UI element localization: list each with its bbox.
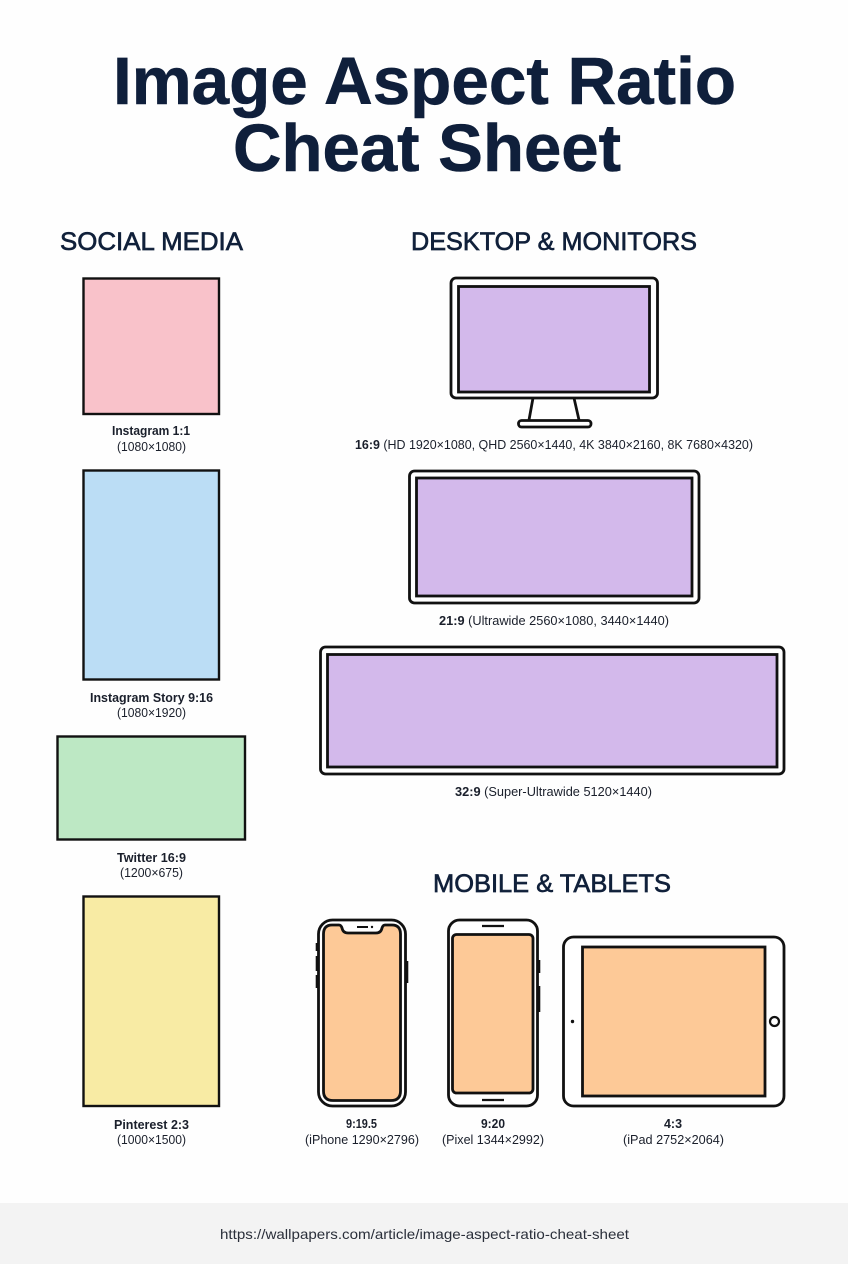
iPad label: 4:3 [664,1117,682,1131]
Pinterest swatch [84,896,219,1106]
21:9 label: 21:9 (Ultrawide 2560×1080, 3440×1440) [439,614,669,628]
Twitter label: (1200×675) [120,866,183,880]
icon: iPad [564,937,784,1106]
Instagram Story swatch [84,470,219,680]
panel: mobile and tablets [305,870,784,1147]
Instagram Story label: (1080×1920) [117,706,186,720]
heading: mobile and tablets: MOBILE & TABLETS [433,870,671,898]
panel: desktop and monitors [320,228,784,799]
Pixel label: (Pixel 1344×2992) [442,1133,544,1147]
panel: social media [58,228,245,1147]
icon: 16:9 monitor [451,278,658,427]
Instagram Story label: Instagram Story 9:16 [90,691,213,705]
Instagram 1:1 label: (1080×1080) [117,440,186,454]
iPhone label: 9:19.5 [346,1117,377,1131]
Instagram 1:1 label [112,424,190,454]
heading: social media: SOCIAL MEDIA [60,228,243,256]
Pinterest label: (1000×1500) [117,1133,186,1147]
icon: iPhone [317,920,407,1106]
iPhone label [305,1117,419,1147]
Pinterest label [114,1118,189,1147]
Pixel label [442,1117,544,1147]
iPhone label: (iPhone 1290×2796) [305,1133,419,1147]
icon: Pixel phone [448,920,539,1106]
title [113,44,736,186]
16:9 label: 16:9 (HD 1920×1080, QHD 2560×1440, 4K 3840×2160, 8K 7680×4320) [355,438,753,452]
Pinterest label: Pinterest 2:3 [114,1118,189,1132]
Pixel label: 9:20 [481,1117,505,1131]
footer [0,1203,848,1264]
title: Image Aspect Ratio [113,44,736,119]
Twitter label: Twitter 16:9 [117,851,186,865]
Instagram Story label [90,691,213,720]
Twitter label [117,851,186,880]
32:9 label: 32:9 (Super-Ultrawide 5120×1440) [455,785,652,799]
Instagram 1:1 label: Instagram 1:1 [112,424,190,438]
heading: desktop and monitors: DESKTOP & MONITORS [411,228,697,256]
Instagram 1:1 swatch [84,278,219,414]
iPad label: (iPad 2752×2064) [623,1133,724,1147]
Twitter swatch [58,736,245,840]
icon: 32:9 monitor [320,647,784,774]
title: Cheat Sheet [233,111,621,186]
footer url: https://wallpapers.com/article/image-aspect-ratio-cheat-sheet [220,1226,629,1242]
icon: 21:9 monitor [410,471,699,603]
iPad label [623,1117,724,1147]
